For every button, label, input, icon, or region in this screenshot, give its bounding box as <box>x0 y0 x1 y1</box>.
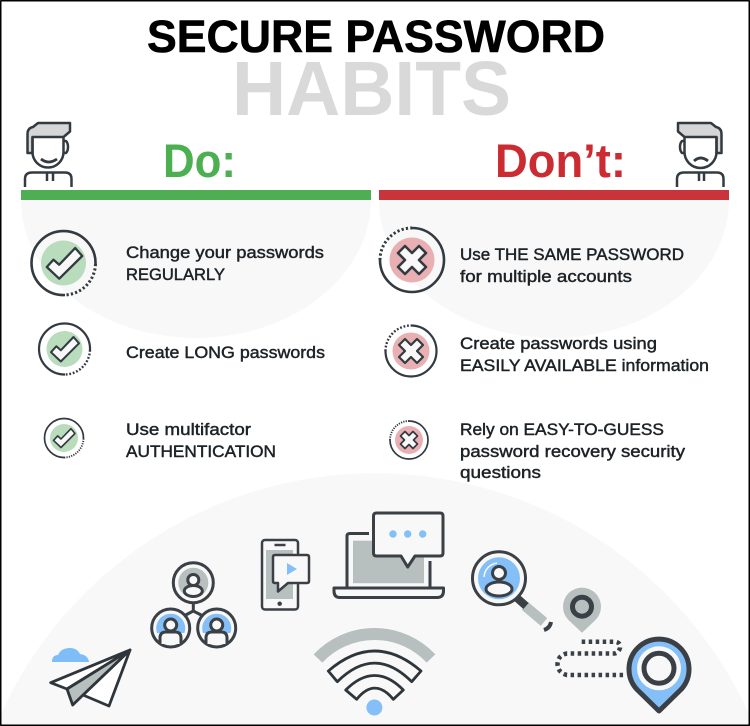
green bar <box>21 190 371 200</box>
icon: phone with video bubble <box>262 540 309 610</box>
don't list text: Rely on EASY-TO-GUESS <box>460 421 664 439</box>
heading: don't: Don’t: <box>495 134 626 187</box>
title: SECURE PASSWORD <box>147 11 605 62</box>
do list text: Change your passwords <box>126 244 324 262</box>
icon: blue map pin <box>629 639 689 711</box>
don't list text: EASILY AVAILABLE information <box>460 357 709 375</box>
do list text: REGULARLY <box>126 266 225 284</box>
background: don't panel <box>379 200 729 338</box>
don't list text: questions <box>460 464 541 482</box>
do list text: Create LONG passwords <box>126 344 325 362</box>
icon: cross badge large <box>380 228 444 292</box>
don't list text <box>460 246 709 482</box>
don't list text: password recovery security <box>460 443 686 461</box>
icon: happy person <box>25 123 72 187</box>
red bar <box>379 190 729 200</box>
icon: cross badge small <box>390 421 428 459</box>
icon: check badge small <box>45 419 84 458</box>
don't list text: for multiple accounts <box>460 268 632 286</box>
icon: route dotted path <box>558 642 626 675</box>
icon: laptop with chat bubble <box>334 513 444 598</box>
don't list text: Use THE SAME PASSWORD <box>460 246 684 264</box>
icon: cross badge medium <box>386 326 436 377</box>
icon: sad person <box>677 123 724 187</box>
icon: wifi <box>318 634 431 716</box>
icon: paper plane <box>51 650 130 706</box>
subtitle: HABITS <box>232 46 511 132</box>
icon: magnifier with user <box>472 552 551 630</box>
do list text: AUTHENTICATION <box>126 443 276 461</box>
background: lower dome <box>0 473 750 726</box>
do list text <box>126 244 325 461</box>
icon: check badge large <box>32 231 96 295</box>
icon: cloud <box>52 648 89 662</box>
background: do panel <box>21 200 371 338</box>
don't list text: Create passwords using <box>460 335 657 353</box>
icon: check badge medium <box>39 324 90 375</box>
do list text: Use multifactor <box>126 421 252 439</box>
icon: grey map pin <box>563 588 601 633</box>
icon: user network <box>152 563 236 647</box>
heading: do: Do: <box>163 134 236 187</box>
